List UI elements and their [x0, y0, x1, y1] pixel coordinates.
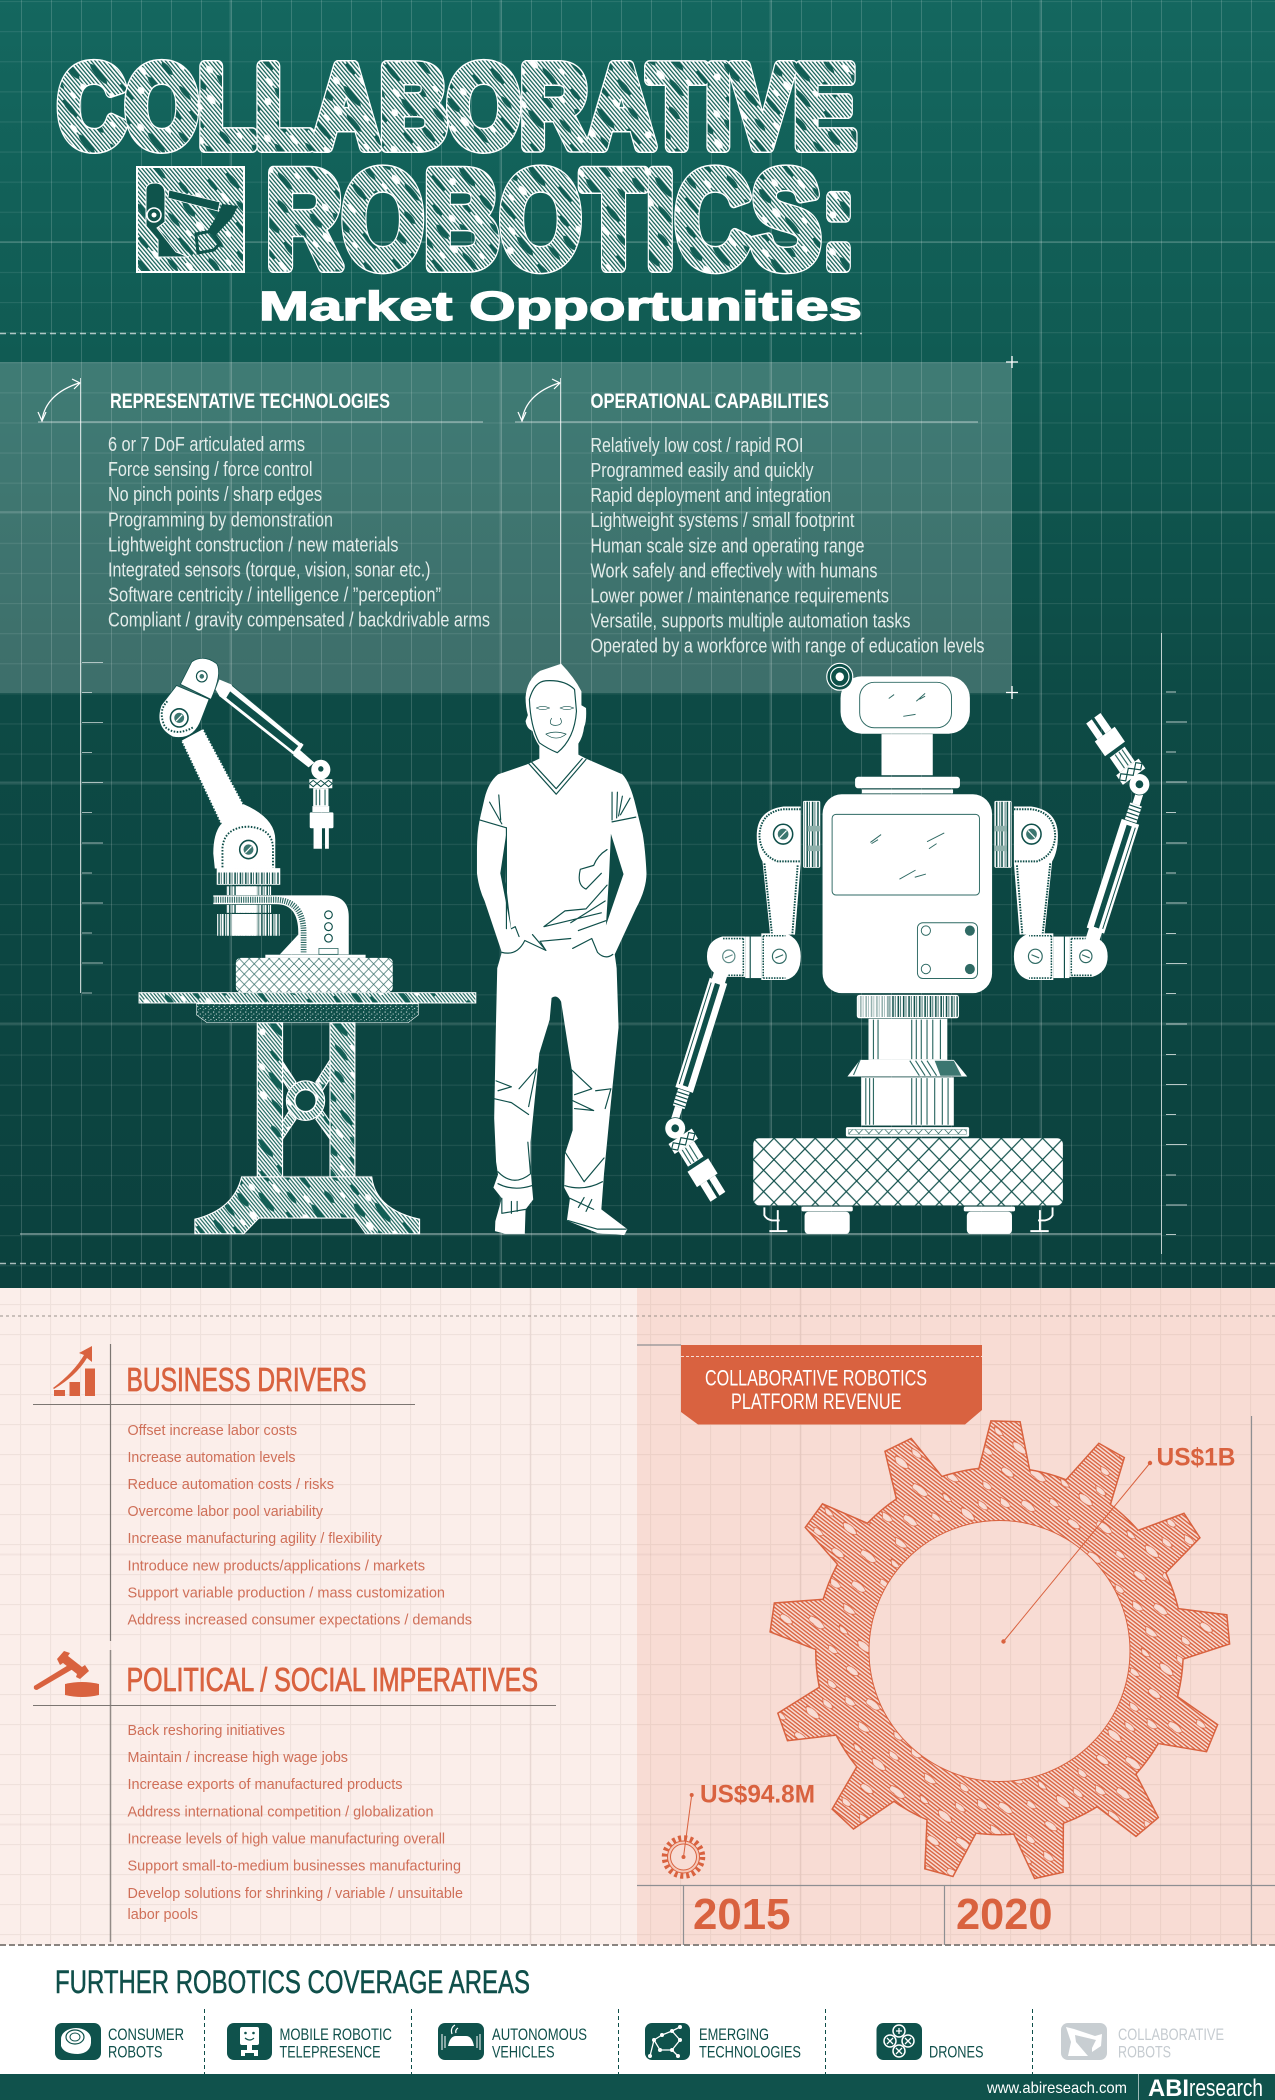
list: political and social imperatives: [128, 1722, 463, 1923]
list: political and social imperatives: Maintain / increase high wage jobs: [128, 1749, 348, 1766]
item: emerging technologies: EMERGING: [699, 2025, 769, 2044]
label: 2020: 2020: [956, 1890, 1052, 1939]
item: consumer robots: ROBOTS: [108, 2042, 162, 2062]
panel: translucent capabilities panel: [0, 362, 1012, 693]
background: darker pink chart column: [637, 1288, 1275, 1945]
list: capabilities: Lightweight systems / small footprint: [590, 510, 855, 532]
chart: large gear 2020: [769, 1420, 1230, 1880]
list: technologies: Integrated sensors (torque, vision, sonar etc.): [108, 560, 430, 582]
list: business drivers: Reduce automation costs / risks: [128, 1476, 334, 1493]
item: emerging technologies: TECHNOLOGIES: [699, 2042, 801, 2062]
list: political and social imperatives: labor pools: [128, 1906, 198, 1923]
illustration: humanoid robot: [658, 663, 1157, 1234]
ruler: right scale and ground line: [20, 633, 1187, 1254]
list: capabilities: Operated by a workforce with range of education levels: [590, 636, 984, 658]
list: technologies: Programming by demonstration: [108, 510, 333, 532]
list: capabilities: Rapid deployment and integration: [590, 485, 831, 507]
item: emerging technologies: [645, 2023, 801, 2062]
list: political and social imperatives: Increase exports of manufactured products: [128, 1776, 402, 1793]
callout: US$94.8M: US$94.8M: [700, 1780, 815, 1808]
list: business drivers: Offset increase labor costs: [128, 1422, 297, 1439]
banner: platform revenue: [681, 1345, 982, 1424]
heading: political and social imperatives: POLITICAL / SOCIAL IMPERATIVES: [126, 1661, 538, 1698]
list: technologies: Software centricity / intelligence / ”perception”: [108, 584, 441, 606]
neck and collar: [881, 734, 933, 775]
icon: angle arrow: [38, 379, 80, 421]
lower arm: [181, 729, 275, 869]
chart: small gear 2015: [664, 1838, 702, 1876]
panel: political and social imperatives: [33, 1650, 556, 1942]
list: capabilities: Lower power / maintenance requirements: [590, 586, 889, 608]
item: mobile robotic telepresence: TELEPRESENCE: [280, 2042, 380, 2062]
footer url: www.abireseach.com: [986, 2080, 1127, 2097]
right upper arm (mirrored): [995, 801, 1108, 980]
title: Collaborative Robotics: COLLABORATIVE: [58, 42, 856, 172]
icon: robot arm in title: [137, 167, 244, 272]
list: political and social imperatives: Increase levels of high value manufacturing overall: [128, 1830, 445, 1848]
list: political and social imperatives: Back reshoring initiatives: [128, 1722, 285, 1739]
chart: revenue axes: [637, 1345, 1275, 1945]
list: business drivers: Support variable production / mass customization: [128, 1584, 445, 1602]
table top: [139, 993, 476, 1003]
cross-hatched mount: [236, 958, 393, 992]
item: collaborative robots: ROBOTS: [1118, 2042, 1171, 2062]
banner: platform revenue: COLLABORATIVE ROBOTICS: [705, 1366, 927, 1390]
heading: operational capabilities: OPERATIONAL CAPABILITIES: [590, 390, 829, 413]
bracket: [213, 895, 349, 954]
clamps: [764, 1207, 1053, 1231]
item: mobile robotic telepresence: MOBILE ROBOTIC: [280, 2025, 392, 2044]
list: business drivers: Introduce new products/applications / markets: [128, 1558, 425, 1574]
list: capabilities: Versatile, supports multiple automation tasks: [590, 610, 910, 632]
heading: further robotics coverage areas: FURTHER ROBOTICS COVERAGE AREAS: [55, 1964, 530, 2000]
callout: US$94.8M: [682, 1780, 815, 1859]
title: Collaborative Robotics: ROBOTICS:: [266, 144, 856, 296]
gripper: [309, 760, 333, 849]
screen: [832, 814, 979, 895]
list: business drivers: Increase manufacturing agility / flexibility: [128, 1530, 382, 1547]
list: technologies: Compliant / gravity compensated / backdrivable arms: [108, 610, 490, 632]
list: capabilities: Programmed easily and quickly: [590, 460, 814, 482]
clothing and face lines: [480, 681, 636, 1229]
item: mobile robotic telepresence: [227, 2023, 392, 2062]
list: business drivers: [128, 1422, 472, 1628]
table underplate: [196, 1004, 418, 1023]
list: technologies: [108, 434, 490, 632]
list: technologies: 6 or 7 DoF articulated arms: [108, 434, 305, 456]
icon: gavel: [34, 1651, 99, 1697]
right forearm and gripper: [1082, 710, 1157, 945]
panel: operational capabilities: [515, 378, 984, 666]
banner: platform revenue: PLATFORM REVENUE: [731, 1389, 902, 1414]
list: capabilities: Work safely and effectively with humans: [590, 560, 878, 582]
title: Collaborative Robotics: [58, 42, 856, 296]
corner marks of panel: [1006, 356, 1018, 699]
heading: representative technologies: REPRESENTATIVE TECHNOLOGIES: [110, 390, 390, 413]
item: drones: [876, 2023, 984, 2062]
list: political and social imperatives: Address international competition / globalization: [128, 1804, 434, 1820]
icon: growth chart: [53, 1346, 95, 1396]
item: drones: DRONES: [929, 2042, 984, 2062]
list: political and social imperatives: Support small-to-medium businesses manufacturing: [128, 1858, 461, 1874]
antenna ring: [827, 663, 853, 690]
item: autonomous vehicles: AUTONOMOUS: [492, 2025, 587, 2044]
panel: representative technologies: [38, 378, 490, 993]
title: Collaborative Robotics: ROBOTICS:: [266, 144, 856, 296]
footer bar: [0, 2074, 1275, 2100]
heading: business drivers: BUSINESS DRIVERS: [126, 1361, 366, 1398]
list: business drivers: Increase automation levels: [128, 1449, 296, 1466]
title: Collaborative Robotics: COLLABORATIVE: [58, 42, 856, 172]
background: pale pink section: [0, 1288, 637, 1945]
ruler: left scale ticks: [82, 662, 103, 993]
body: [823, 794, 992, 993]
robot head: [841, 676, 970, 734]
illustration: robot arm on table: [139, 658, 476, 1234]
list: capabilities: Human scale size and operating range: [590, 536, 864, 558]
panel plate: [917, 923, 978, 978]
item: collaborative robots: [1061, 2023, 1224, 2062]
crosshatch base: [753, 1138, 1063, 1205]
elbow: [159, 685, 209, 737]
torso base: [846, 995, 969, 1137]
list: capabilities: [590, 435, 984, 658]
callout: US$1B: [1001, 1444, 1236, 1644]
list: technologies: Force sensing / force control: [108, 459, 312, 481]
item: collaborative robots: COLLABORATIVE: [1118, 2025, 1224, 2044]
section: further coverage areas: [55, 1964, 1224, 2074]
list: technologies: No pinch points / sharp edges: [108, 484, 322, 506]
table legs: [257, 1023, 355, 1177]
list: business drivers: Overcome labor pool variability: [128, 1503, 323, 1520]
arm gaps: [500, 830, 624, 931]
subtitle: Market Opportunities: Market Opportunities: [259, 283, 862, 329]
left forearm and gripper: [658, 967, 731, 1205]
dashed divider at bottom of dark section: [0, 1262, 1275, 1264]
list: capabilities: Relatively low cost / rapid ROI: [590, 435, 804, 457]
illustration: standing man: [477, 664, 646, 1235]
item: consumer robots: [55, 2023, 184, 2062]
item: consumer robots: CONSUMER: [108, 2025, 184, 2044]
upper arm rod: [216, 680, 304, 757]
list: political and social imperatives: Develop solutions for shrinking / variable / unsuitable: [128, 1885, 463, 1902]
left upper arm: [707, 801, 820, 980]
list: business drivers: Address increased consumer expectations / demands: [128, 1612, 472, 1628]
label: 2015: 2015: [693, 1890, 790, 1939]
item: autonomous vehicles: VEHICLES: [492, 2042, 554, 2062]
wheels: [801, 1207, 1015, 1234]
table base: [195, 1177, 420, 1234]
item: autonomous vehicles: [438, 2023, 587, 2062]
callout: US$1B: US$1B: [1156, 1444, 1236, 1472]
icon: angle arrow: [518, 379, 560, 421]
list: technologies: Lightweight construction / new materials: [108, 534, 398, 556]
background: dark blueprint section: [0, 0, 1275, 1288]
rotary base: [217, 914, 280, 936]
panel: business drivers: [33, 1344, 472, 1641]
